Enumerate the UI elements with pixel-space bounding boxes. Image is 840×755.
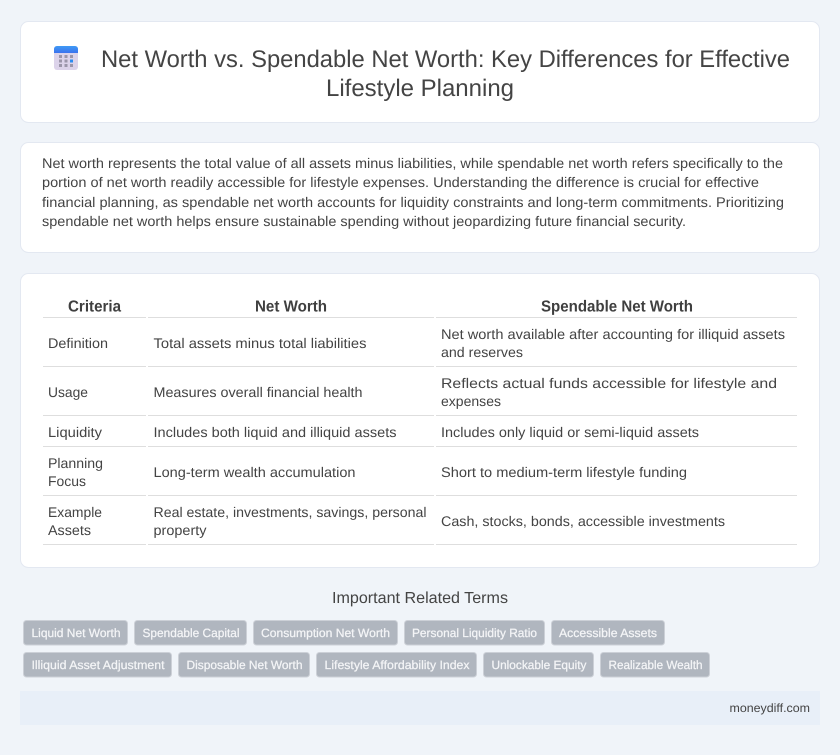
tags: related terms: Realizable Wealth xyxy=(608,658,702,672)
table header xyxy=(68,298,693,316)
text block: introduction paragraph: portion of net worth readily accessible for lifestyle expenses. Understanding the difference is crucial for effective xyxy=(42,174,759,190)
row: usage: expenses xyxy=(441,393,501,409)
row: example assets: property xyxy=(154,522,206,538)
row: example assets xyxy=(48,504,725,538)
title: Lifestyle Planning xyxy=(326,75,514,102)
row: usage xyxy=(48,375,777,409)
row: planning focus: Focus xyxy=(48,473,86,489)
row: liquidity: Includes both liquid and illiquid assets xyxy=(154,424,396,440)
tags: related terms: Consumption Net Worth xyxy=(261,626,390,640)
row: definition: Total assets minus total liabilities xyxy=(154,335,366,351)
table header: Spendable Net Worth xyxy=(541,298,693,316)
row: usage: Measures overall financial health xyxy=(154,384,362,400)
row: liquidity: Liquidity xyxy=(48,424,102,440)
tags: related terms xyxy=(24,620,710,677)
title: Net Worth vs. Spendable Net Worth: Key Differences for Effective xyxy=(101,46,790,73)
row: definition: Net worth available after accounting for illiquid assets xyxy=(441,326,785,342)
text block: introduction paragraph: spendable net worth helps ensure sustainable spending without jeopardizing future financial security. xyxy=(42,213,686,229)
row: example assets: Real estate, investments, savings, personal xyxy=(154,504,426,520)
tags: related terms: Personal Liquidity Ratio xyxy=(412,626,537,640)
tags: related terms: Illiquid Asset Adjustment xyxy=(32,658,165,672)
row: example assets: Cash, stocks, bonds, accessible investments xyxy=(441,513,725,529)
tags: related terms: Unlockable Equity xyxy=(492,658,586,672)
table header: Criteria xyxy=(68,298,121,316)
icon: calendar xyxy=(54,46,78,70)
row: definition: and reserves xyxy=(441,344,523,360)
row: liquidity xyxy=(48,424,699,440)
row: usage: Reflects actual funds accessible for lifestyle and xyxy=(441,375,777,391)
row: example assets: Assets xyxy=(48,522,91,538)
row: example assets: Example xyxy=(48,504,102,520)
footer xyxy=(20,691,820,725)
tags: related terms: Disposable Net Worth xyxy=(186,658,302,672)
panel: title card xyxy=(20,22,820,122)
footer: moneydiff.com xyxy=(730,701,810,715)
row: definition xyxy=(48,326,785,360)
table header: Net Worth xyxy=(255,298,327,316)
text block: introduction paragraph: financial planning, as spendable net worth accounts for liquidity constraints and long-term commitments. Prioritizing xyxy=(42,194,784,210)
row: definition: Definition xyxy=(48,335,108,351)
row: planning focus: Planning xyxy=(48,455,103,471)
heading: important related terms: Important Related Terms xyxy=(332,590,508,607)
tags: related terms: Spendable Capital xyxy=(142,626,240,640)
title xyxy=(101,46,790,102)
row: planning focus: Short to medium-term lifestyle funding xyxy=(441,464,687,480)
row: planning focus: Long-term wealth accumulation xyxy=(154,464,356,480)
row: usage: Usage xyxy=(48,384,88,400)
row: liquidity: Includes only liquid or semi-liquid assets xyxy=(441,424,699,440)
tags: related terms: Lifestyle Affordability Index xyxy=(324,658,470,672)
panel: introduction xyxy=(20,142,820,252)
row: planning focus xyxy=(48,455,687,489)
text block: introduction paragraph: Net worth represents the total value of all assets minus liabilities, while spendable net worth refers specifically to the xyxy=(42,155,783,171)
panel: comparison table xyxy=(20,274,820,568)
text block: introduction paragraph xyxy=(42,155,784,229)
tags: related terms: Liquid Net Worth xyxy=(32,626,120,640)
tags: related terms: Accessible Assets xyxy=(559,626,657,640)
